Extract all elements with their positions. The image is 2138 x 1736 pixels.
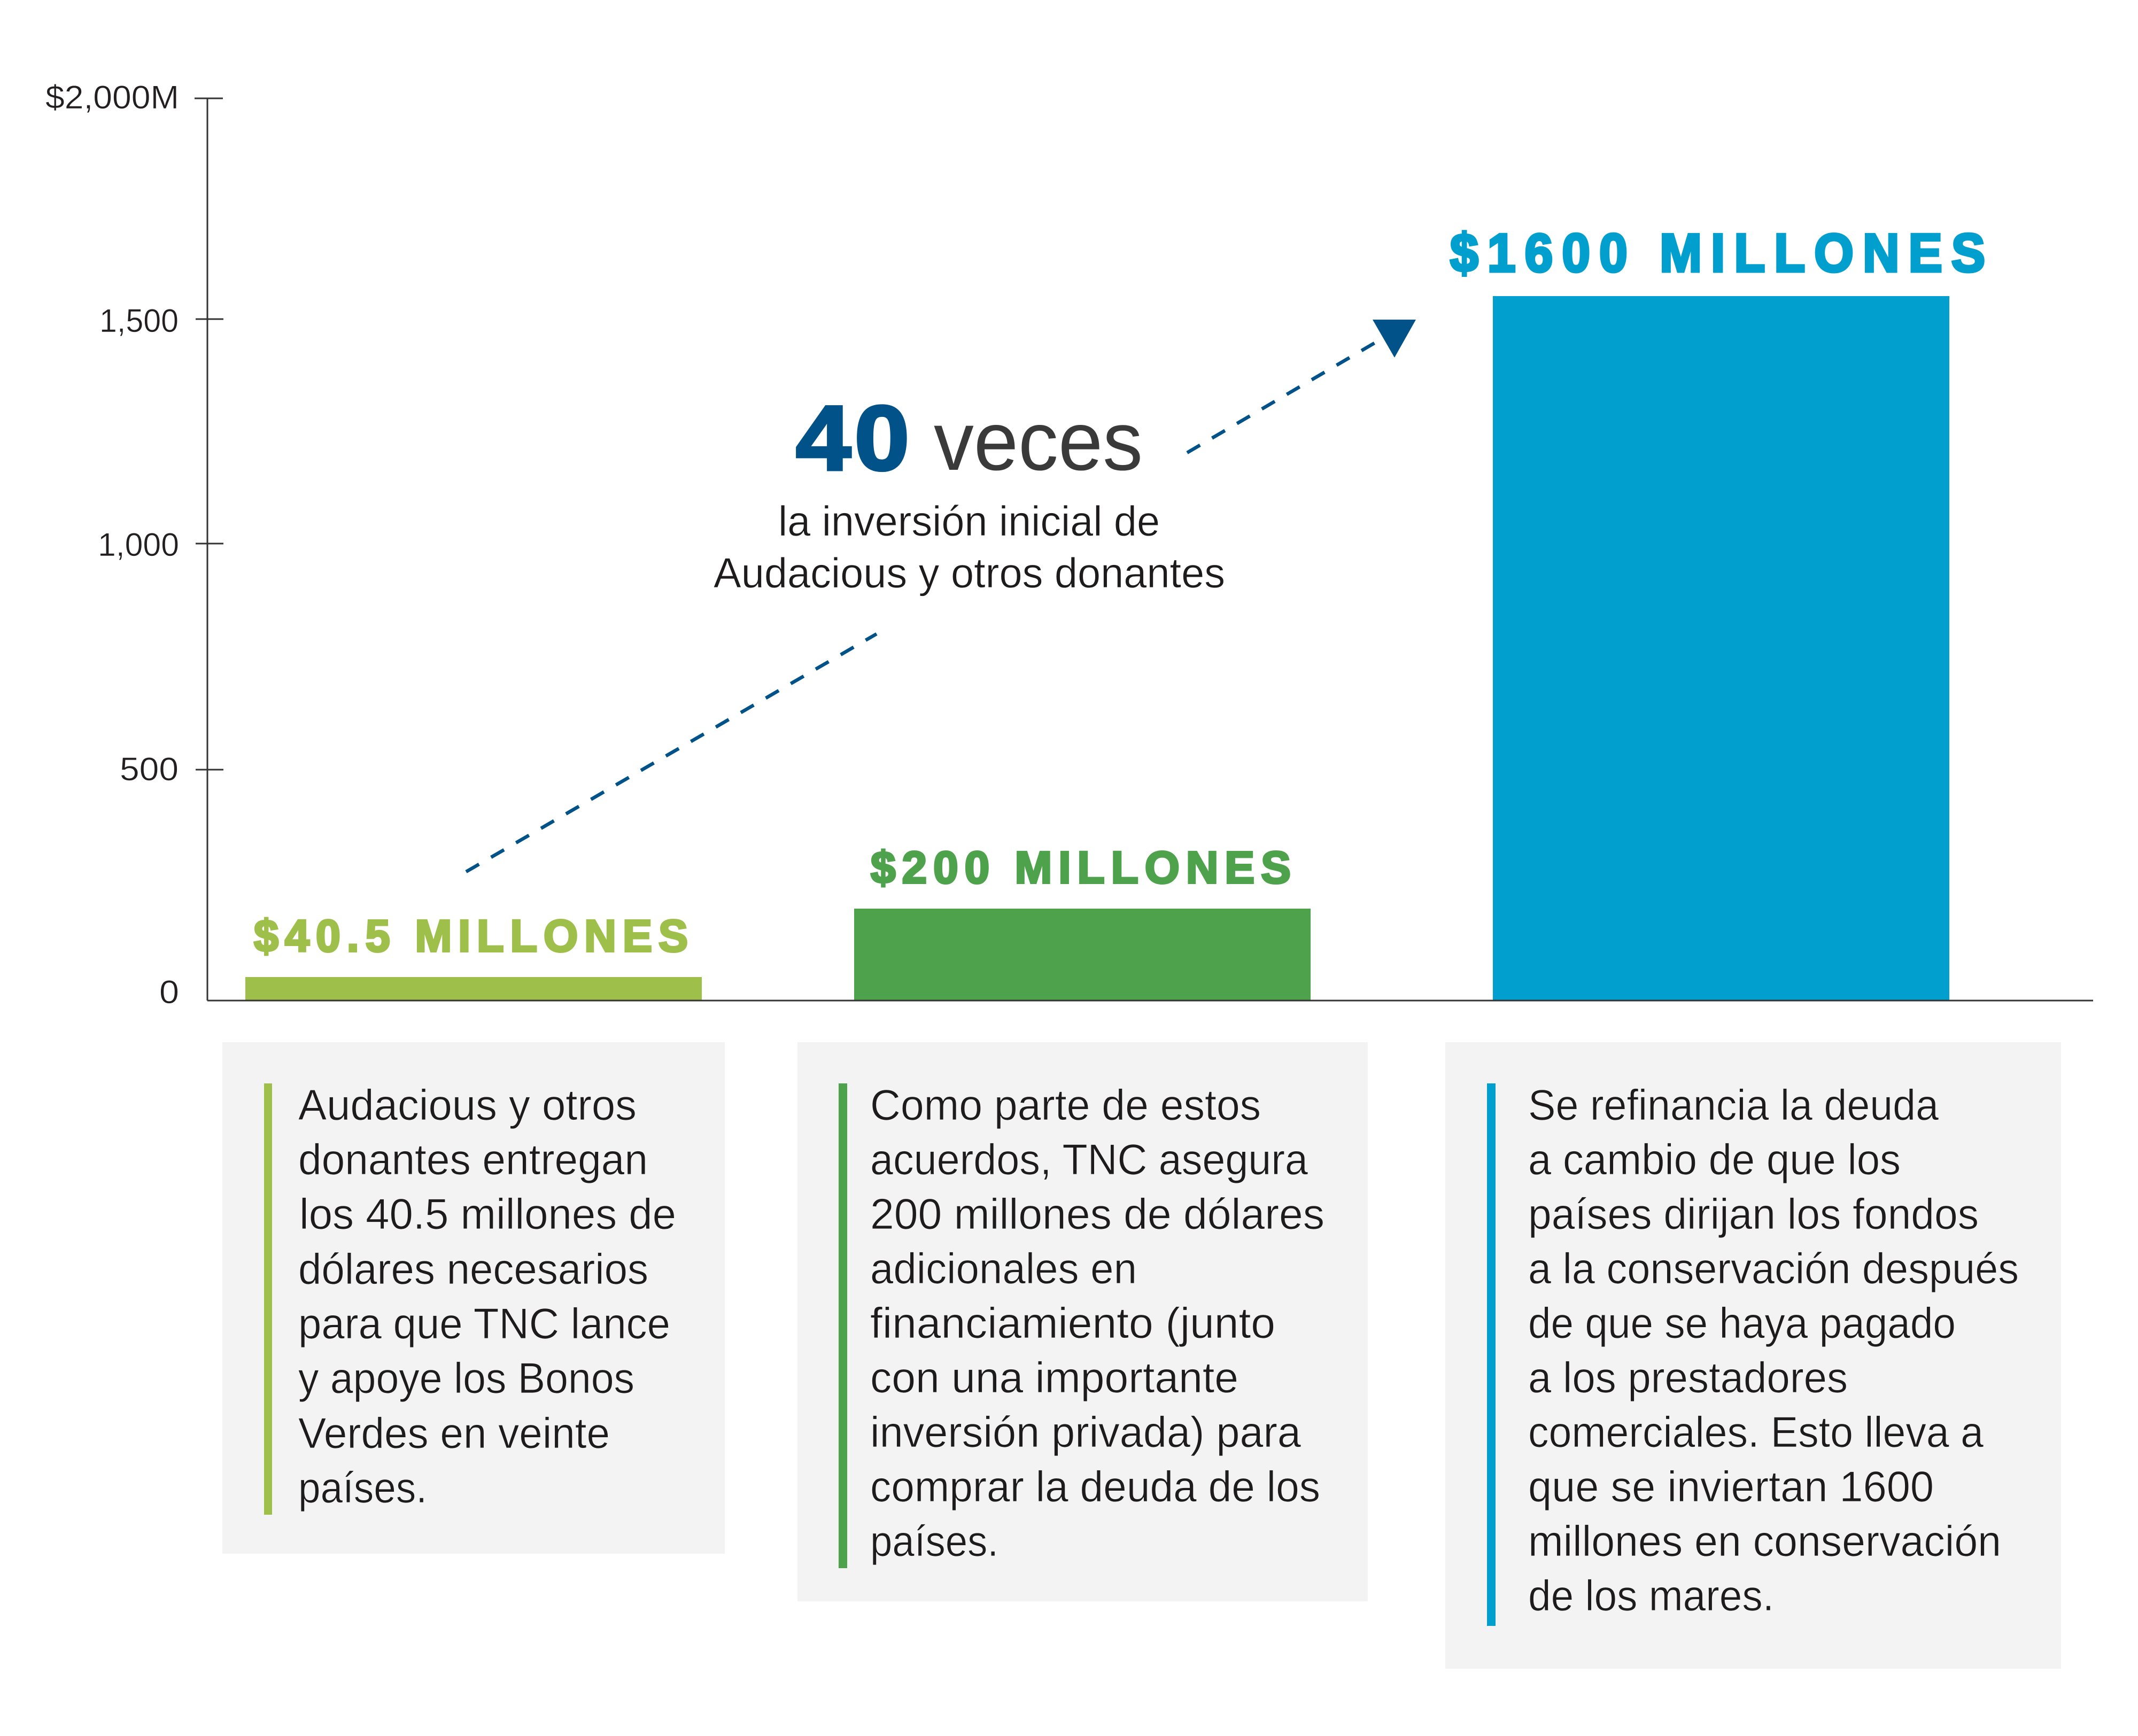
- panel text: donantes: Verdes en veinte: [298, 1409, 610, 1458]
- panel text: donantes: [298, 1081, 676, 1512]
- panel text: donantes: dólares necesarios: [298, 1245, 648, 1293]
- callout subtitle: la inversión inicial de: [778, 497, 1160, 545]
- y axis labels: $2,000M: [45, 79, 179, 115]
- panel text: refinanciamiento: [1528, 1081, 2019, 1620]
- panel text: refinanciamiento: de que se haya pagado: [1528, 1299, 1956, 1347]
- panel: financiamiento: [797, 1042, 1368, 1601]
- x axis baseline: [207, 999, 2093, 1002]
- callout: 40 veces: [714, 387, 1225, 596]
- accent bar: light green: [264, 1083, 272, 1515]
- bar label: 1600 millones: $1600 MILLONES: [1450, 223, 1994, 283]
- callout subtitle: [714, 497, 1225, 596]
- panel text: financiamiento: adicionales en: [870, 1245, 1137, 1293]
- arrowhead: [1373, 320, 1416, 358]
- panel text: financiamiento: países.: [870, 1517, 998, 1565]
- panel text: refinanciamiento: Se refinancia la deuda: [1528, 1081, 1939, 1129]
- panel text: financiamiento: 200 millones de dólares: [870, 1190, 1324, 1238]
- panel text: refinanciamiento: países dirijan los fondos: [1528, 1190, 1979, 1238]
- callout number: 40: [796, 387, 913, 490]
- y axis with ticks: [195, 98, 223, 1001]
- panel text: financiamiento: [870, 1081, 1324, 1565]
- callout subtitle: Audacious y otros donantes: [714, 549, 1225, 596]
- panel text: refinanciamiento: a los prestadores: [1528, 1354, 1848, 1402]
- accent bar: green: [839, 1083, 847, 1568]
- arrow: dashed growth line: [466, 320, 1416, 872]
- panel text: financiamiento: acuerdos, TNC asegura: [870, 1136, 1308, 1184]
- panel: donantes: [222, 1042, 725, 1554]
- y axis labels: [45, 79, 179, 1010]
- callout word: veces: [934, 395, 1143, 488]
- y axis labels: 1,000: [98, 526, 179, 563]
- panel: refinanciamiento: [1445, 1042, 2061, 1669]
- accent bar: blue: [1487, 1083, 1496, 1626]
- bar: 200 millones: [854, 909, 1311, 1001]
- panel text: financiamiento: con una importante: [870, 1354, 1238, 1402]
- panel text: donantes: Audacious y otros: [298, 1081, 637, 1129]
- panel text: refinanciamiento: a cambio de que los: [1528, 1136, 1901, 1184]
- y axis labels: 500: [120, 751, 179, 787]
- panel text: financiamiento: financiamiento (junto: [870, 1299, 1275, 1347]
- bar label: 40.5 millones: $40.5 MILLONES: [254, 911, 694, 961]
- panel text: financiamiento: inversión privada) para: [870, 1408, 1302, 1456]
- panel text: refinanciamiento: de los mares.: [1528, 1572, 1774, 1620]
- panel text: donantes: y apoye los Bonos: [298, 1354, 634, 1402]
- bar chart: [45, 79, 2093, 1010]
- panel text: financiamiento: Como parte de estos: [870, 1081, 1261, 1129]
- panel text: financiamiento: comprar la deuda de los: [870, 1463, 1320, 1511]
- panel text: refinanciamiento: que se inviertan 1600: [1528, 1463, 1934, 1511]
- bar label: 200 millones: $200 MILLONES: [871, 842, 1297, 893]
- bar: 40.5 millones: [245, 977, 702, 1001]
- panel text: refinanciamiento: comerciales. Esto lleva a: [1528, 1408, 1984, 1456]
- panel text: donantes: donantes entregan: [298, 1136, 648, 1184]
- panel text: donantes: los 40.5 millones de: [299, 1190, 676, 1238]
- upper dashed segment: [1187, 341, 1378, 453]
- panel text: donantes: países.: [298, 1464, 427, 1512]
- panel text: donantes: para que TNC lance: [298, 1300, 670, 1348]
- y axis labels: 1,500: [99, 303, 179, 339]
- bar: 1600 millones: [1493, 296, 1949, 1001]
- panel text: refinanciamiento: millones en conservación: [1528, 1517, 2001, 1565]
- y axis labels: 0: [159, 974, 179, 1010]
- lower dashed segment: [466, 634, 877, 872]
- panel text: refinanciamiento: a la conservación después: [1528, 1245, 2019, 1293]
